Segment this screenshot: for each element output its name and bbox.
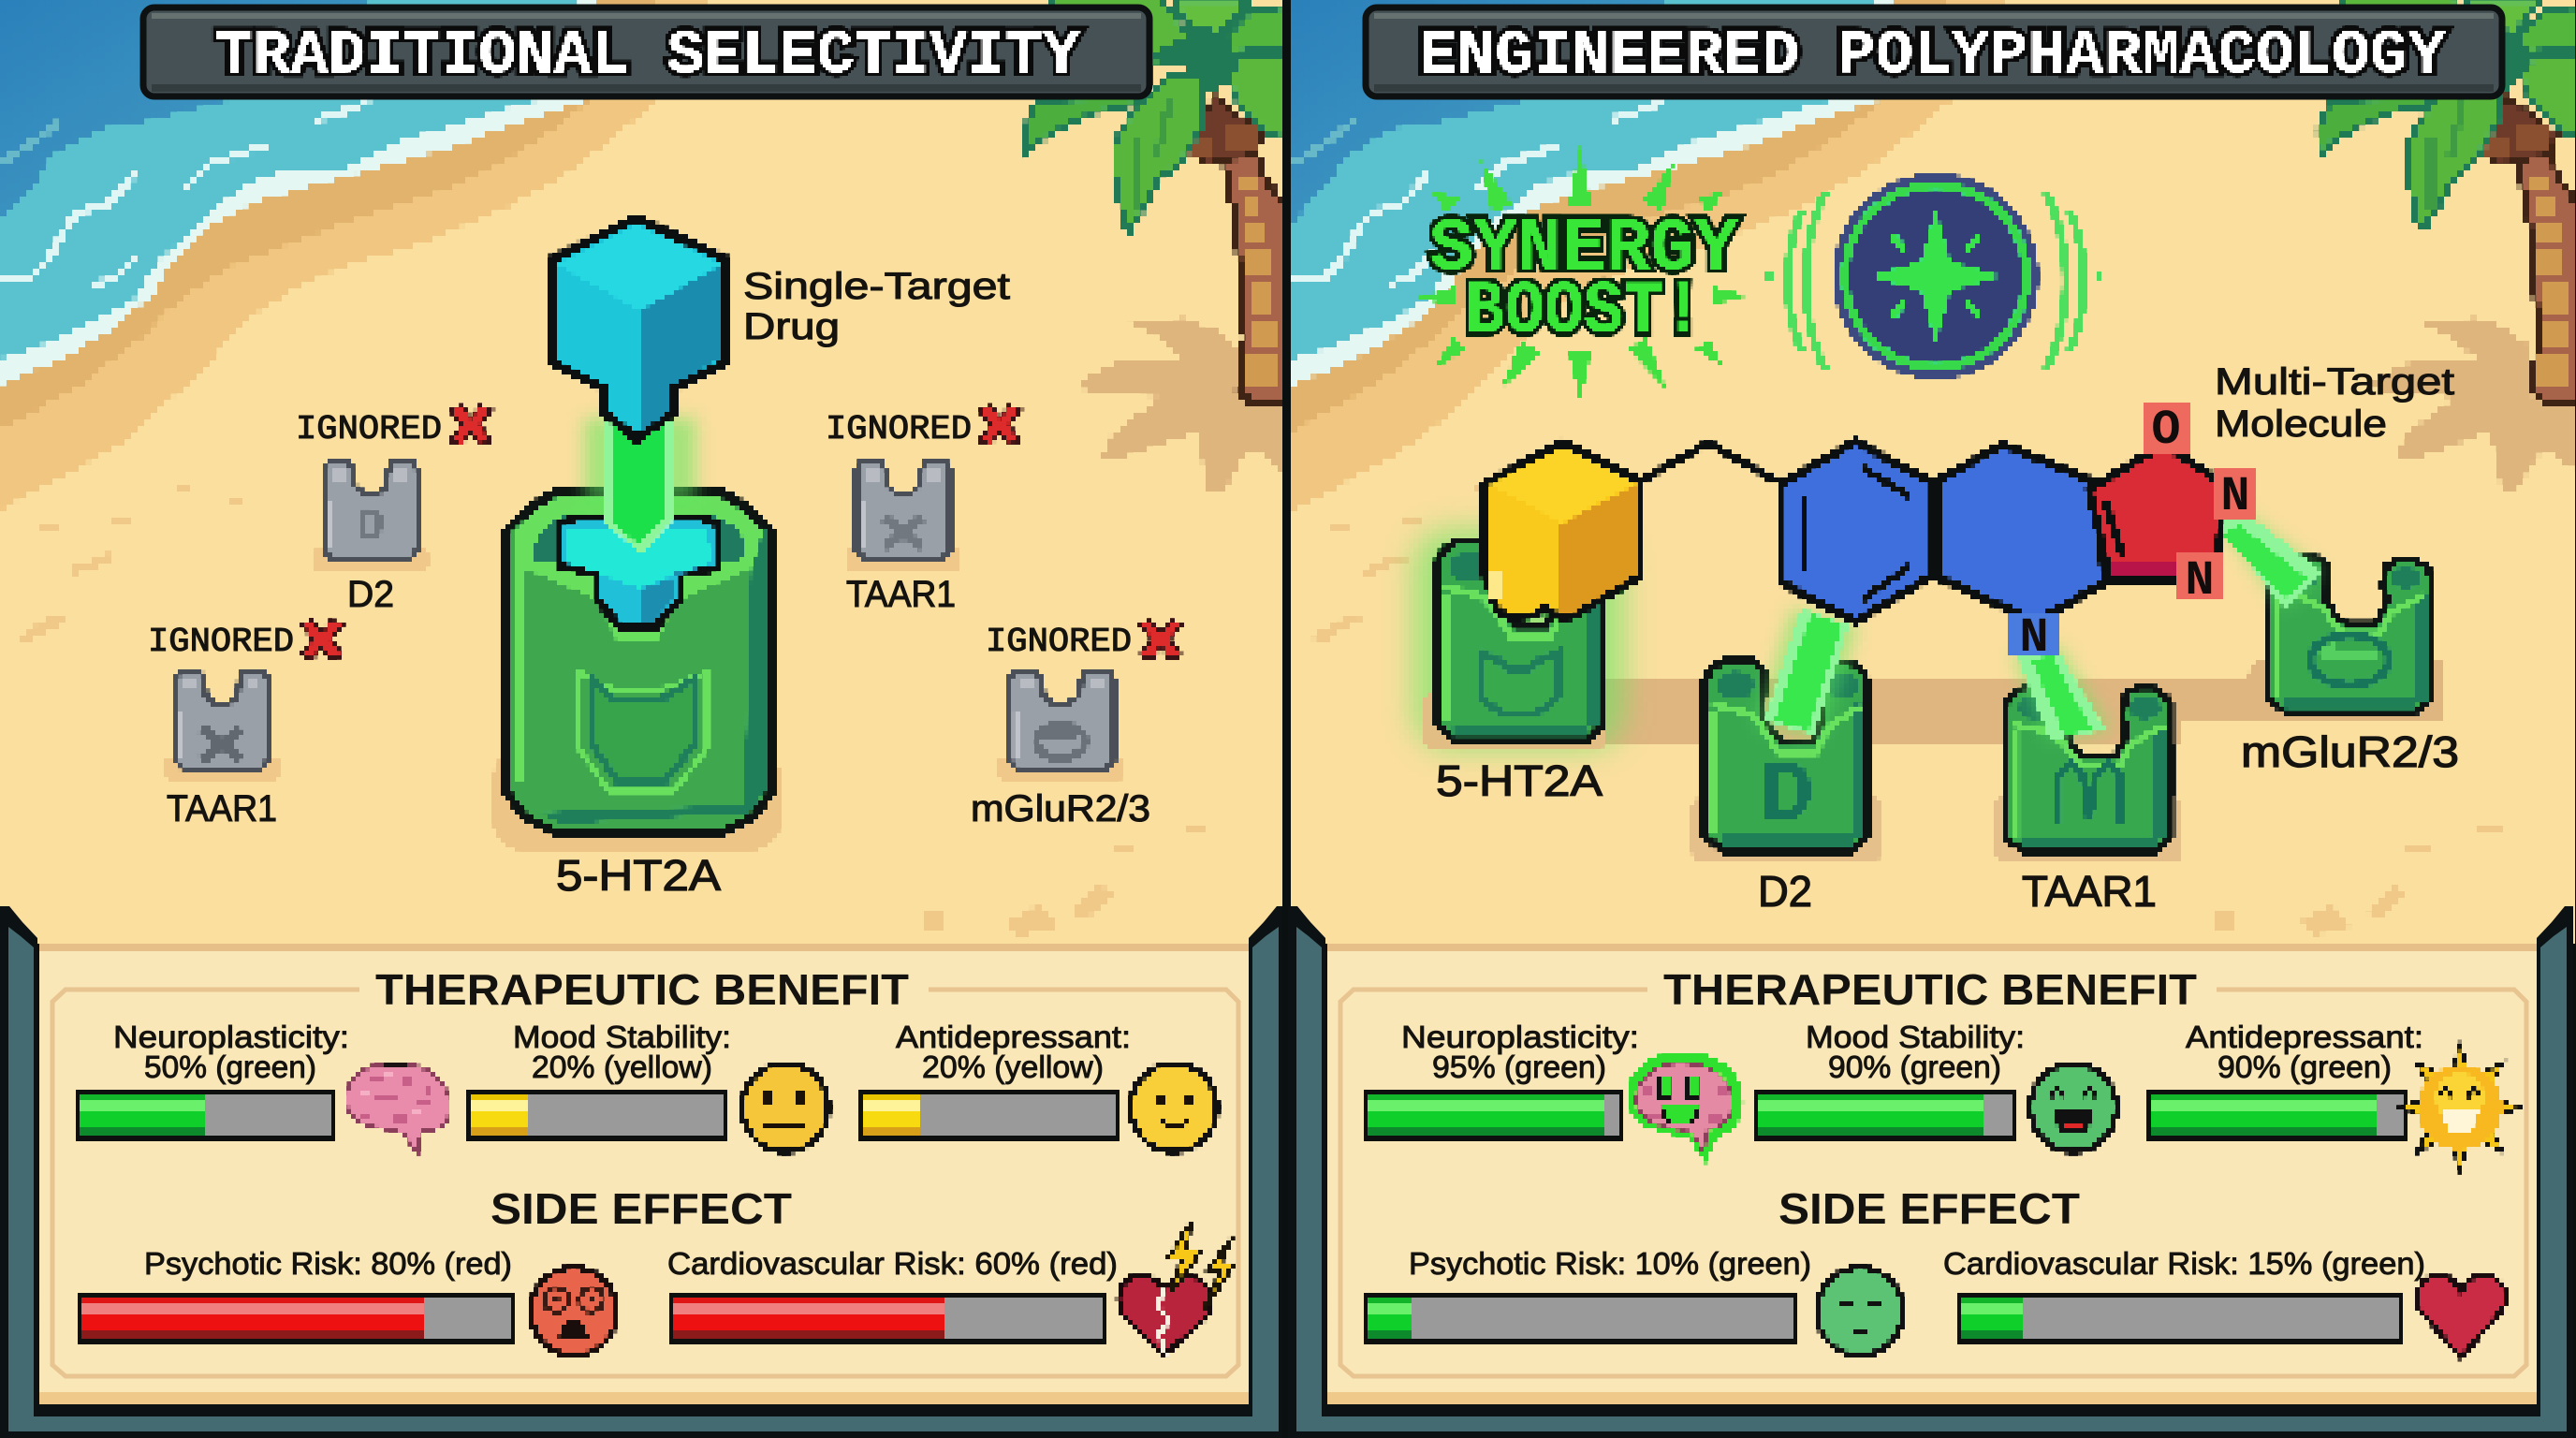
bar: psychotic risk 10%: Psychotic Risk: 10% (green) xyxy=(1409,1246,1811,1281)
molecule and receptor labels: TAAR1 xyxy=(2022,867,2157,916)
icon: D2 green receptor xyxy=(1691,660,1882,863)
dashboard: therapeutic benefit: THERAPEUTIC BENEFIT xyxy=(375,965,909,1014)
scene labels xyxy=(148,266,1150,900)
dashboard: side effect: SIDE EFFECT xyxy=(490,1184,792,1233)
icon: 5-HT2A green receptor with glow xyxy=(1413,529,1624,751)
icon: calm green face xyxy=(1817,1268,1903,1356)
dashboard icons right: side effect xyxy=(1817,1268,2506,1357)
scene labels: TAAR1 xyxy=(846,574,956,615)
icon: healthy red heart xyxy=(2417,1275,2506,1357)
title banner xyxy=(143,7,1149,96)
bar: antidepressant 90% xyxy=(2146,1020,2423,1141)
molecule and receptor labels: O xyxy=(2151,403,2181,458)
bar: psychotic risk 80% xyxy=(78,1246,515,1344)
panel: traditional selectivity xyxy=(0,0,1288,1438)
dashboard icons: benefit xyxy=(346,1061,1217,1153)
panel: engineered polypharmacology xyxy=(1288,0,2576,1438)
molecule and receptor labels xyxy=(1436,361,2459,916)
bar: psychotic risk 80%: Psychotic Risk: 80% (red) xyxy=(144,1246,512,1281)
molecule and receptor labels: mGluR2/3 xyxy=(2241,727,2459,776)
synergy text xyxy=(1429,207,1738,355)
scene labels: mGluR2/3 xyxy=(971,788,1150,829)
bar: mood stability 90%: Mood Stability: xyxy=(1806,1020,2025,1054)
icon: D2 green receptor: D xyxy=(1760,745,1814,847)
red heterocycle xyxy=(2089,445,2224,580)
dashboard icons: side effect xyxy=(531,1222,1234,1356)
receptor and drug artwork xyxy=(164,218,1181,850)
molecular shadow band xyxy=(1600,660,2445,742)
scene labels: IGNORED xyxy=(986,623,1132,661)
atom badges xyxy=(2009,403,2258,655)
panel divider xyxy=(1282,0,1294,1438)
bar: psychotic risk 10% xyxy=(1364,1246,1811,1344)
bar: mood stability 90%: 90% (green) xyxy=(1828,1049,2001,1084)
icon: broken heart with lightning xyxy=(1119,1222,1234,1356)
bar: cardiovascular risk 15% xyxy=(1943,1246,2425,1344)
icon: smiling sun xyxy=(2401,1046,2520,1169)
bar: antidepressant 90%: Antidepressant: xyxy=(2186,1020,2423,1054)
icon: red X marks xyxy=(301,406,1181,659)
scene labels: D2 xyxy=(347,574,394,615)
synergy text: BOOST! xyxy=(1465,270,1703,355)
bar: neuroplasticity 95%: 95% (green) xyxy=(1432,1049,1606,1084)
dashboard: side effect xyxy=(78,1184,1118,1344)
icon: TAAR1 green receptor xyxy=(1994,686,2183,863)
scene labels: Single-Target xyxy=(743,266,1010,307)
icon: cyan single-target drug xyxy=(550,218,727,627)
dashboard: therapeutic benefit xyxy=(76,965,1131,1141)
icon: slightly smiling yellow face xyxy=(1131,1064,1217,1152)
icon: mGluR2/3 ignored receptor xyxy=(996,670,1125,781)
synergy artwork xyxy=(1413,146,2445,863)
icon: TAAR1 ignored receptor bottom xyxy=(164,670,282,781)
bar: neuroplasticity 95% xyxy=(1364,1020,1639,1141)
scene labels: 5-HT2A xyxy=(556,851,721,900)
title banner: TRADITIONAL SELECTIVITY xyxy=(215,21,1080,91)
scene labels: IGNORED xyxy=(296,410,442,448)
bar: antidepressant 20%: Antidepressant: xyxy=(896,1020,1131,1054)
bar: neuroplasticity 95%: Neuroplasticity: xyxy=(1401,1020,1639,1054)
molecule and receptor labels: N xyxy=(2019,610,2049,666)
synergy text: SYNERGY xyxy=(1429,207,1738,292)
scene labels: Drug xyxy=(743,306,840,347)
molecule and receptor labels: N xyxy=(2220,469,2250,524)
icon: neutral yellow face xyxy=(742,1064,828,1152)
icon: synergy emblem xyxy=(1765,173,2103,379)
bar: neuroplasticity 50%: 50% (green) xyxy=(144,1049,316,1084)
icon: synergy burst rays xyxy=(1415,146,1748,400)
bar: neuroplasticity 50%: Neuroplasticity: xyxy=(113,1020,349,1054)
icon: grinning green face xyxy=(2030,1064,2116,1152)
molecule and receptor labels: N xyxy=(2185,553,2215,609)
bar: cardiovascular risk 15%: Cardiovascular Risk: 15% (green) xyxy=(1943,1246,2425,1281)
beach background right xyxy=(1294,0,2576,946)
scene labels: TAAR1 xyxy=(167,788,277,829)
molecule and receptor labels: 5-HT2A xyxy=(1436,756,1603,805)
bar: cardiovascular risk 60%: Cardiovascular Risk: 60% (red) xyxy=(667,1246,1118,1281)
yellow pharmacophore cube xyxy=(1485,442,1640,618)
dashboard right: therapeutic benefit: THERAPEUTIC BENEFIT xyxy=(1663,965,2197,1014)
icon: TAAR1 ignored receptor top xyxy=(845,461,961,572)
scene labels: IGNORED xyxy=(148,623,294,661)
bar: mood stability 20% xyxy=(466,1020,731,1141)
title banner right: ENGINEERED POLYPHARMACOLOGY xyxy=(1419,21,2446,91)
bar: mood stability 20%: 20% (yellow) xyxy=(532,1049,712,1084)
icon: binding beams xyxy=(1755,510,2321,740)
icon: distressed red face xyxy=(531,1268,617,1356)
title banner right xyxy=(1366,7,2502,96)
icon: mGluR2/3 green receptor xyxy=(2268,557,2431,712)
blue aromatic rings xyxy=(1781,442,2105,622)
dashboard frame right xyxy=(1288,906,2573,1438)
bar: cardiovascular risk 60% xyxy=(667,1246,1118,1344)
molecule and receptor labels: Molecule xyxy=(2215,404,2387,445)
icon: D2 ignored receptor xyxy=(313,461,429,572)
icon: pink brain xyxy=(346,1061,449,1153)
icon: happy glowing brain xyxy=(1627,1052,1743,1164)
beach background xyxy=(0,0,1288,946)
bar: mood stability 90% xyxy=(1754,1020,2025,1141)
bar: antidepressant 90%: 90% (green) xyxy=(2217,1049,2392,1084)
bar: antidepressant 20% xyxy=(858,1020,1131,1141)
dashboard icons right: benefit xyxy=(1627,1046,2520,1169)
dashboard right: side effect xyxy=(1364,1184,2425,1344)
molecule and receptor labels: Multi-Target xyxy=(2215,361,2454,403)
icon: large 5-HT2A receptor xyxy=(493,491,781,850)
molecule and receptor labels: D2 xyxy=(1758,867,1812,916)
bar: antidepressant 20%: 20% (yellow) xyxy=(922,1049,1104,1084)
icon: D2 ignored receptor: D xyxy=(357,501,385,554)
dashboard right: side effect: SIDE EFFECT xyxy=(1778,1184,2080,1233)
dashboard right: therapeutic benefit xyxy=(1364,965,2423,1141)
scene labels: IGNORED xyxy=(826,410,972,448)
icon: glowing beam xyxy=(585,418,695,503)
bar: mood stability 20%: Mood Stability: xyxy=(513,1020,731,1054)
icon: multi-target molecule xyxy=(1485,403,2258,655)
dashboard frame xyxy=(0,906,1285,1438)
bar: neuroplasticity 50% xyxy=(76,1020,349,1141)
